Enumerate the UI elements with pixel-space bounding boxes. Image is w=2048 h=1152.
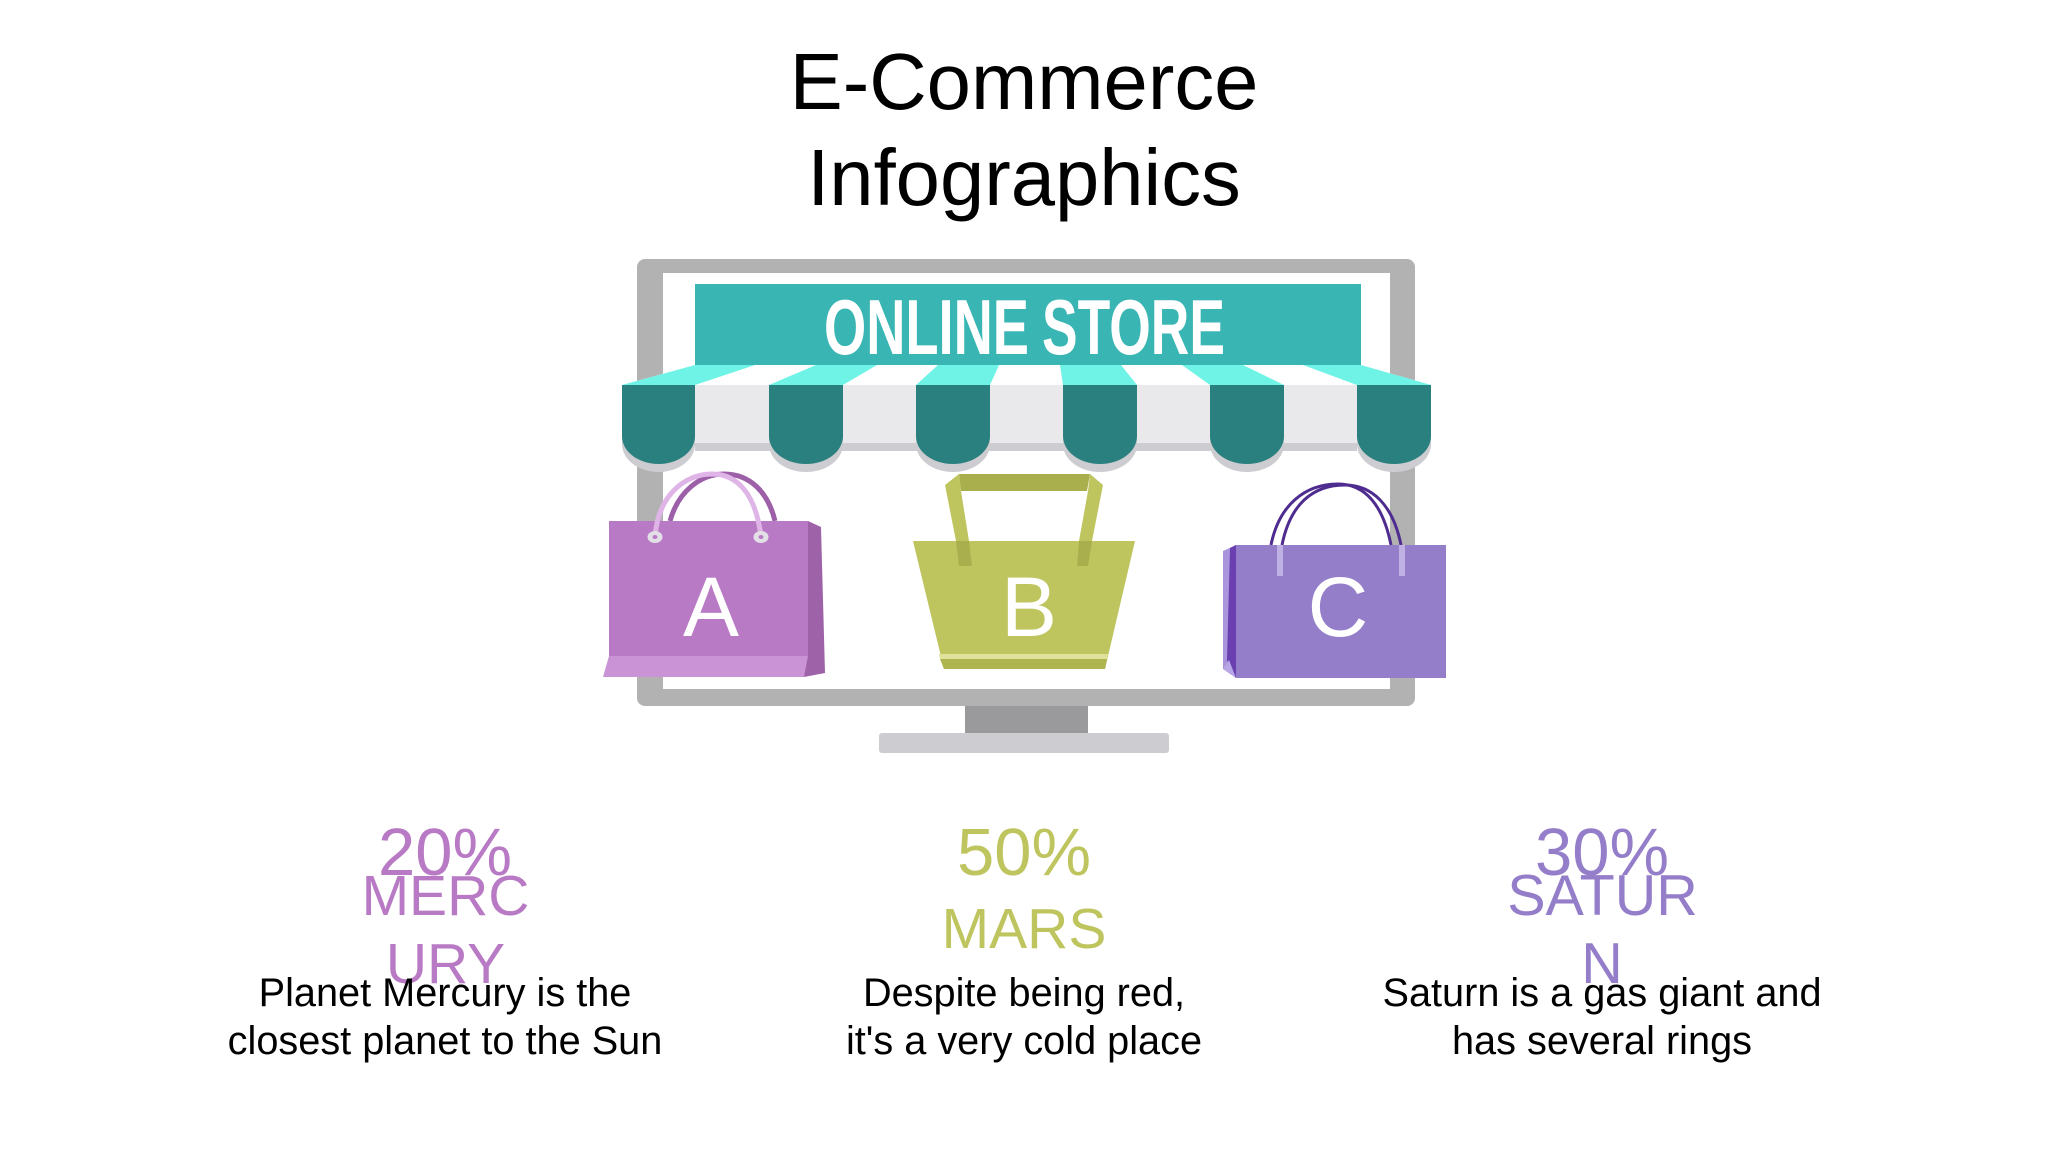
description: Mars <box>846 971 1202 1063</box>
title: Infographics <box>807 133 1241 222</box>
bag A: A <box>683 560 739 654</box>
awning <box>622 365 1431 472</box>
heading: Saturn: N <box>1581 932 1623 996</box>
illustration: online store monitor <box>603 259 1446 753</box>
bag A <box>603 474 825 677</box>
bag B: B <box>1001 560 1057 654</box>
description: Saturn: has several rings <box>1452 1019 1752 1063</box>
column: Mercury <box>228 815 662 1063</box>
description: Mercury: Planet Mercury is the <box>259 971 631 1015</box>
column: Saturn <box>1382 815 1822 1063</box>
description: Saturn: Saturn is a gas giant and <box>1382 971 1822 1015</box>
column: Mars <box>846 815 1202 1063</box>
heading: Saturn <box>1507 864 1698 996</box>
store banner <box>695 283 1361 371</box>
monitor stand <box>879 704 1169 753</box>
heading: Mercury <box>362 864 529 996</box>
description: Mercury: closest planet to the Sun <box>228 1019 662 1063</box>
description: Mars: Despite being red, <box>863 971 1185 1015</box>
monitor frame <box>637 259 1415 706</box>
description: Mercury <box>228 971 662 1063</box>
heading: Mars: MARS <box>942 897 1106 961</box>
heading: Mercury: MERC <box>362 864 529 928</box>
heading: Mercury: URY <box>386 932 505 996</box>
bag C: C <box>1308 560 1368 654</box>
heading: Saturn: SATUR <box>1507 864 1698 928</box>
store banner: ONLINE <box>824 283 1029 371</box>
title <box>790 37 1258 222</box>
bag B <box>913 474 1135 669</box>
store banner: STORE <box>1042 283 1225 371</box>
stat: 50%: 50% <box>957 815 1091 890</box>
description: Saturn <box>1382 971 1822 1063</box>
title: E-Commerce <box>790 37 1258 126</box>
description: Mars: it's a very cold place <box>846 1019 1202 1063</box>
stat: 20%: 20% <box>378 815 512 890</box>
stat: 30%: 30% <box>1535 815 1669 890</box>
bag C <box>1223 484 1446 678</box>
